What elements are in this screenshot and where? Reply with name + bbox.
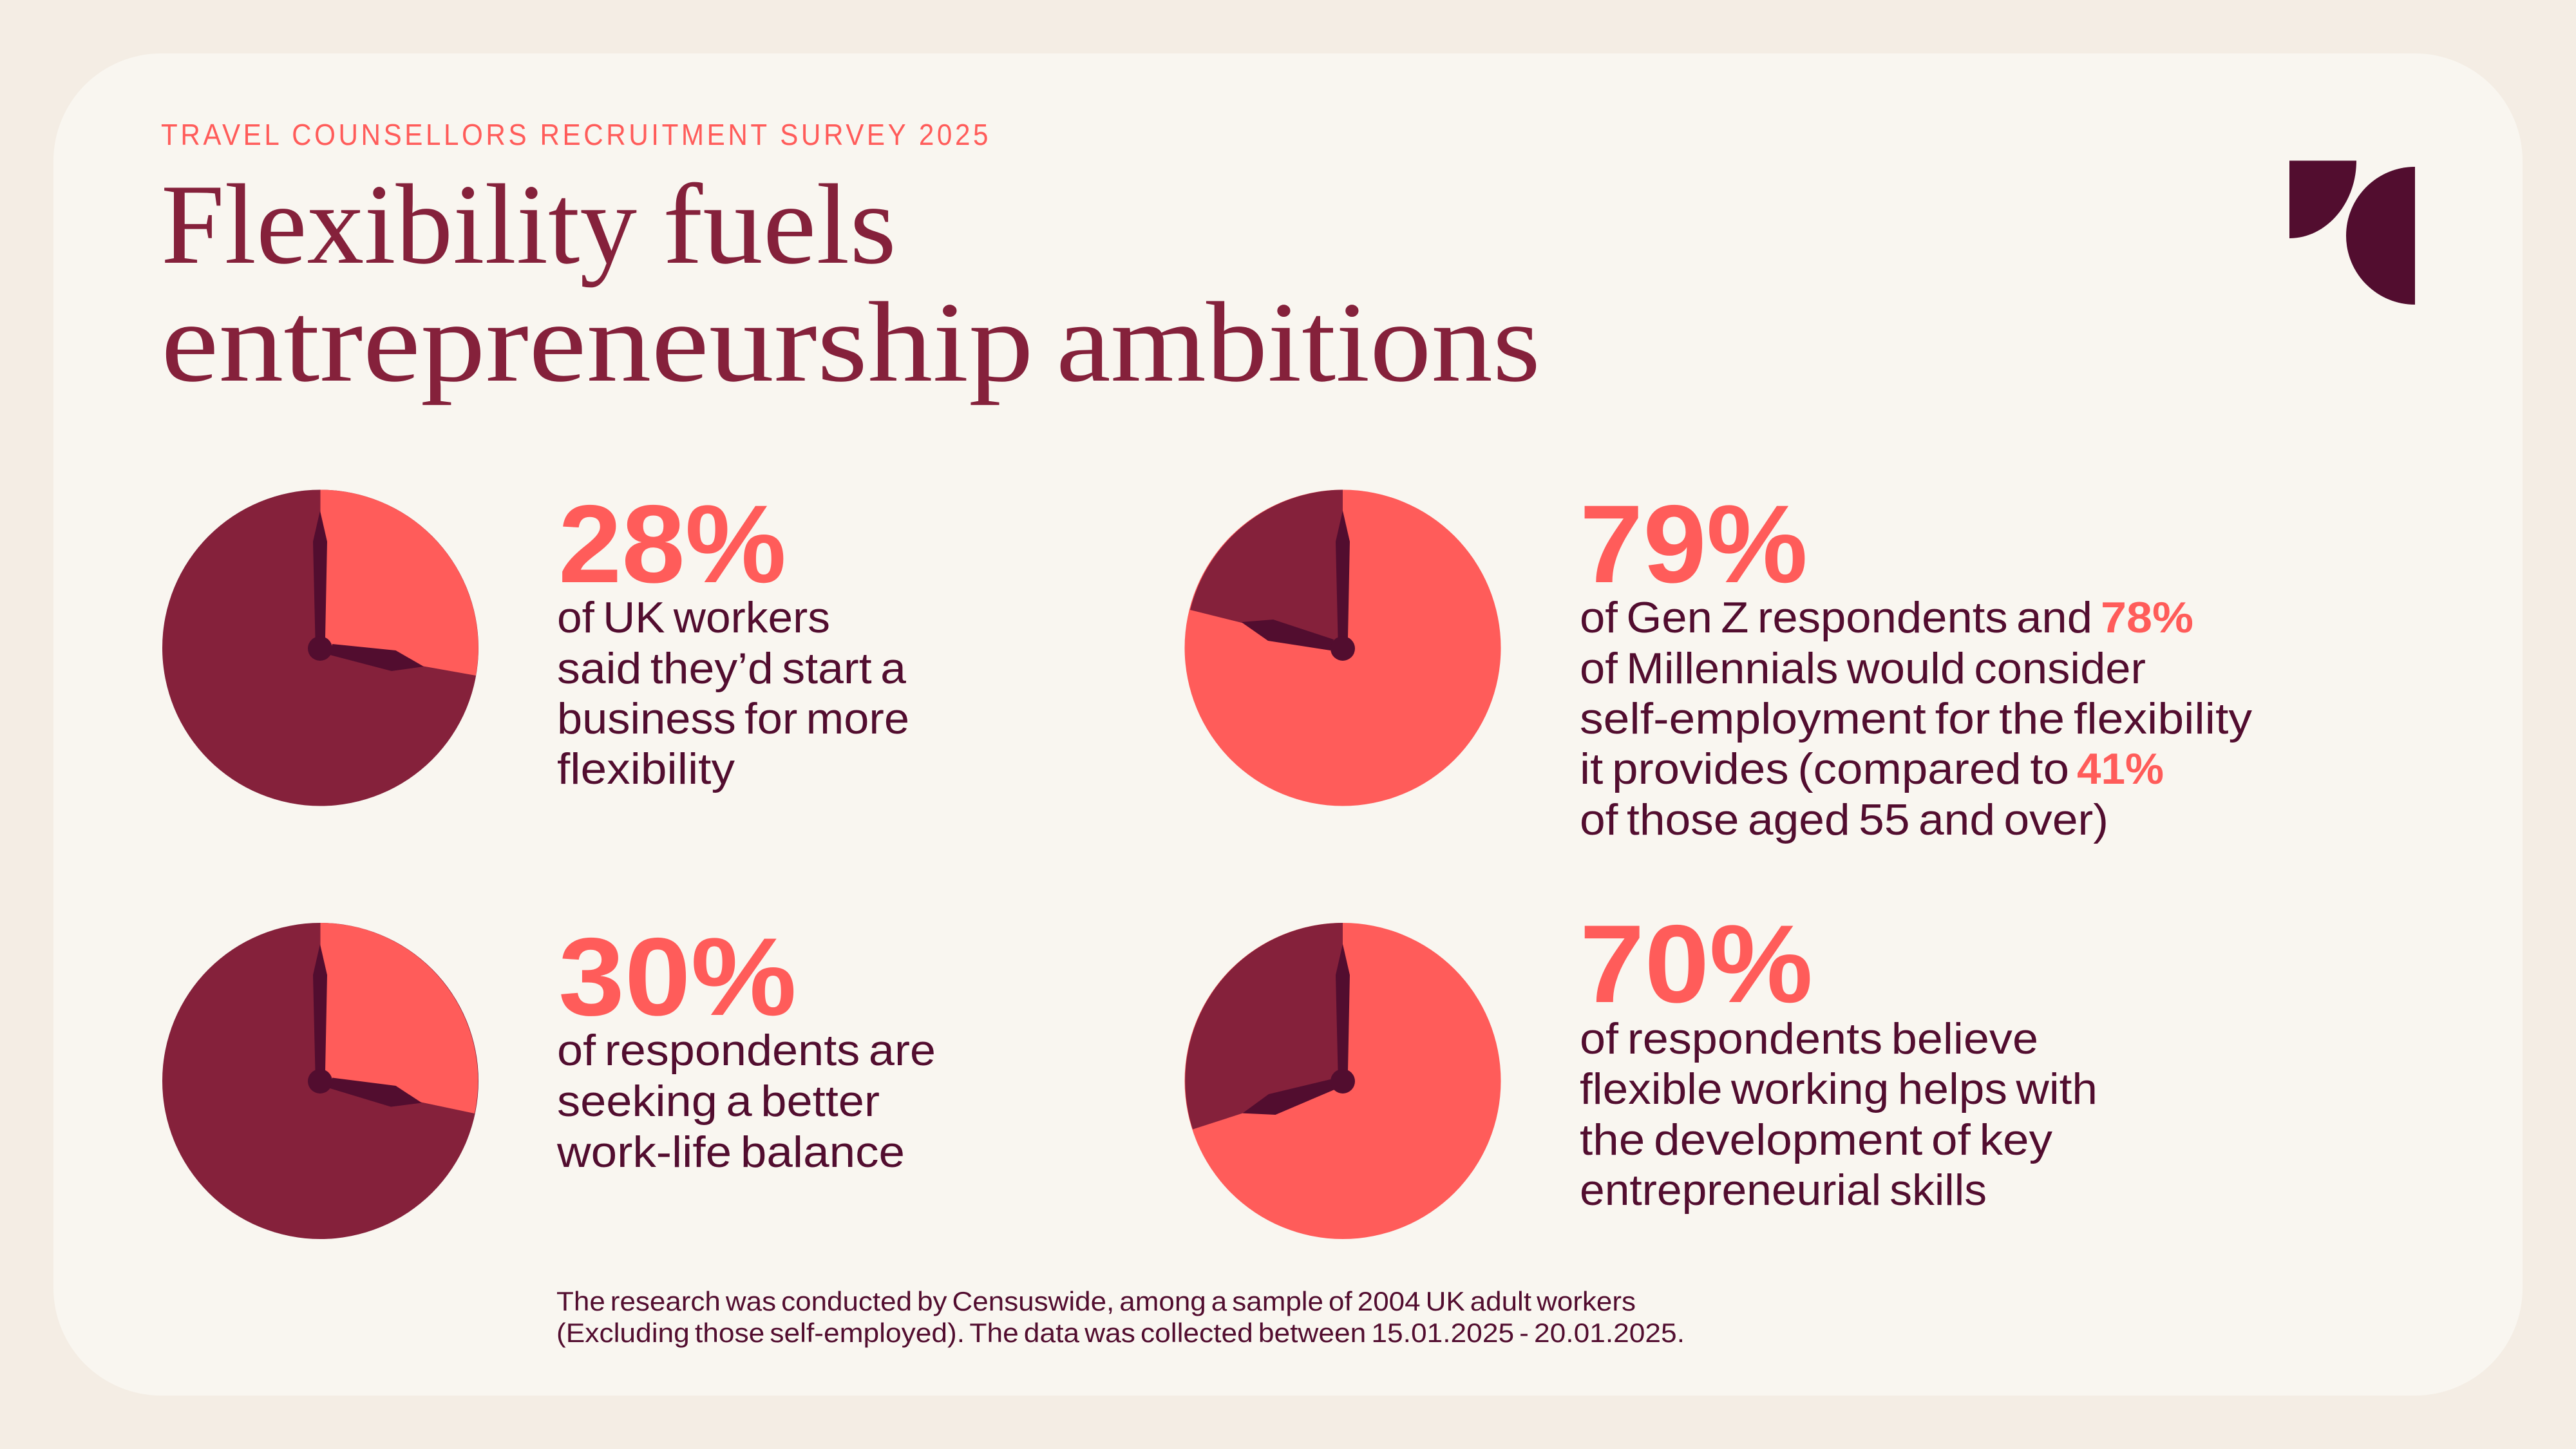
title: entrepreneurship [161, 278, 1034, 406]
stat: 70% flexible working skills: entrepreneurial skills [1580, 1166, 1987, 1215]
eyebrow: survey name: TRAVEL COUNSELLORS RECRUITMENT SURVEY 2025 [161, 118, 991, 151]
icon: clock hands [1242, 511, 1355, 661]
footnote: research source: (Excluding those self-employed). The data was collected between 15.01.2025 - 20.01.2025. [556, 1318, 1685, 1348]
stat: 79% of Gen Z respondents: 41% [2077, 744, 2164, 793]
stat: 70% flexible working skills: flexible working helps with [1580, 1065, 2098, 1113]
stat: 70% flexible working skills: the development of key [1580, 1115, 2052, 1164]
stat: 28% of UK workers: 28% [558, 482, 786, 606]
chart: 30% clock pie [162, 923, 478, 1239]
stat: 30% seeking work-life balance: work-life balance [556, 1128, 905, 1177]
stat: 79% of Gen Z respondents: of Millennials would consider [1580, 644, 2146, 693]
footnote: research source [556, 1286, 1685, 1348]
stat: 30% seeking work-life balance: seeking a better [557, 1077, 880, 1126]
chart: 70% clock pie [1185, 923, 1501, 1239]
stat: 30% seeking work-life balance: of respondents are [557, 1026, 936, 1075]
stat: 70% flexible working skills [1580, 902, 2098, 1215]
stat: 28% of UK workers: business for more [557, 694, 909, 743]
stat: 28% of UK workers [557, 482, 909, 793]
title: Flexibility [161, 160, 637, 288]
icon: clock hands [308, 944, 422, 1107]
stat: 70% flexible working skills: 70% [1580, 902, 1813, 1026]
stat: 28% of UK workers: flexibility [557, 744, 735, 793]
stat: 30% seeking work-life balance: 30% [558, 915, 797, 1039]
stat: 28% of UK workers: said they’d start a [557, 644, 906, 693]
stat: 79% of Gen Z respondents: of Gen Z respondents and [1580, 593, 2092, 642]
stat: 79% of Gen Z respondents: of those aged 55 and over) [1580, 795, 2108, 844]
stat: 79% of Gen Z respondents: 78% [2101, 593, 2193, 642]
footnote: research source: The research was conducted by Censuswide, among a sample of 2004 UK adult workers [556, 1286, 1636, 1316]
icon: brand logo [2289, 161, 2415, 305]
stat: 79% of Gen Z respondents: self-employment for the flexibility [1580, 694, 2252, 743]
chart: 28% clock pie [162, 489, 478, 806]
icon: clock hands [308, 511, 424, 671]
stat: 30% seeking work-life balance [556, 915, 936, 1177]
stat: 79% of Gen Z respondents [1580, 482, 2252, 844]
title [161, 160, 1540, 406]
chart: 79% clock pie [1185, 489, 1501, 806]
stat: 70% flexible working skills: of respondents believe [1580, 1014, 2038, 1063]
stat: 79% of Gen Z respondents: it provides (compared to [1580, 744, 2069, 793]
title: fuels [663, 160, 896, 288]
title: ambitions [1056, 278, 1540, 406]
stat: 79% of Gen Z respondents: 79% [1580, 482, 1808, 606]
stat: 28% of UK workers: of UK workers [557, 593, 830, 642]
icon: clock hands [1243, 944, 1355, 1115]
